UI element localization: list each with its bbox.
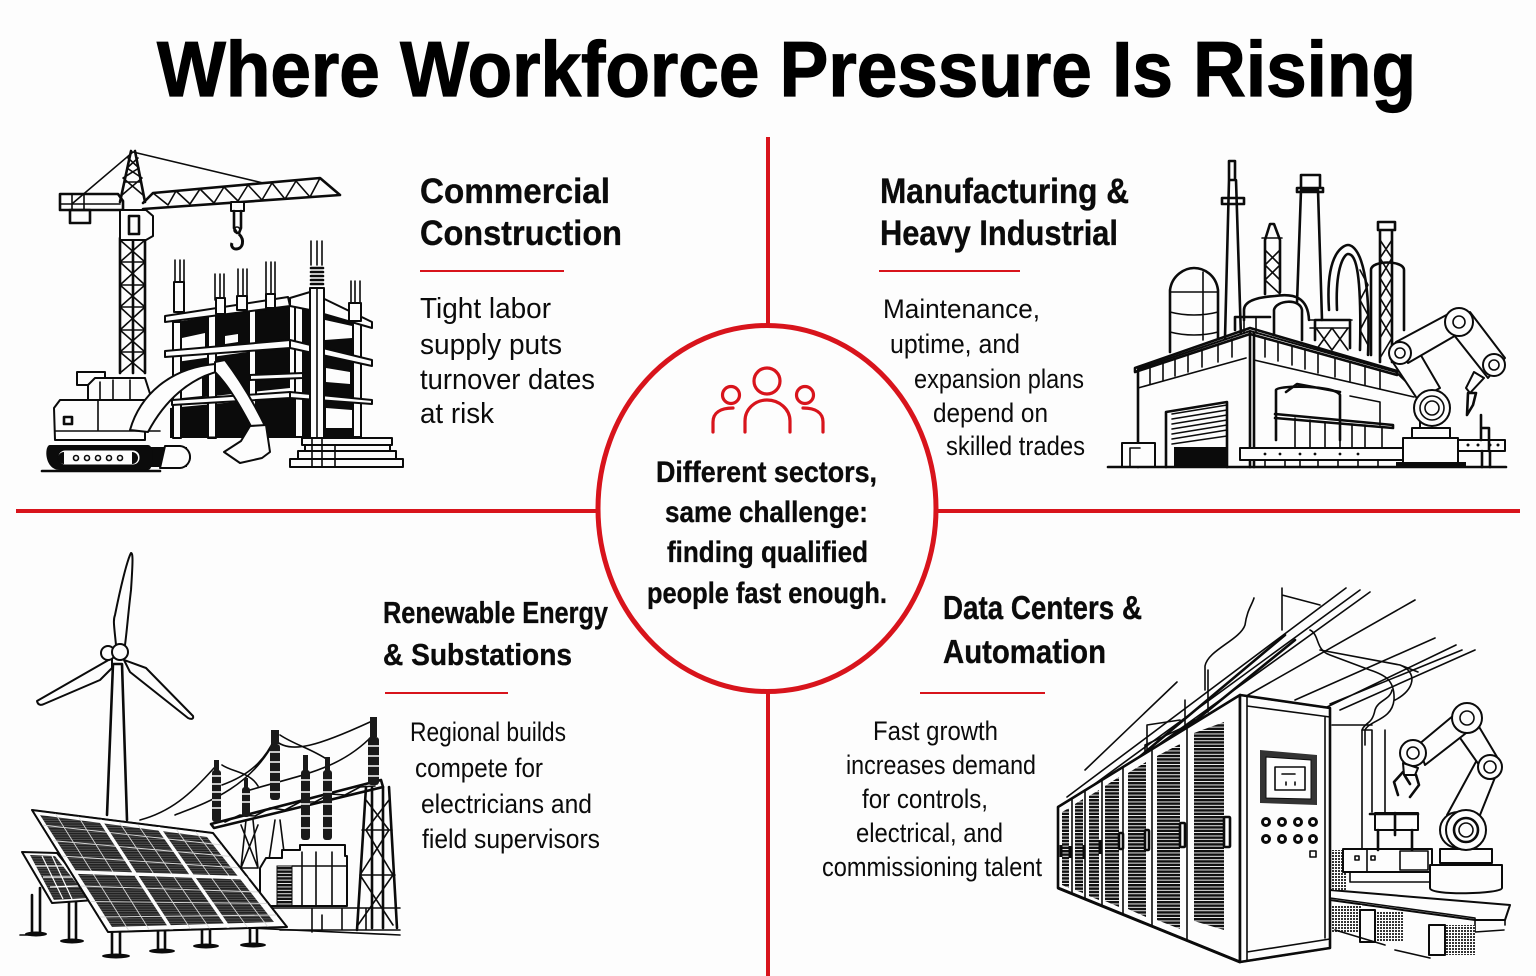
- callout circle: [598, 326, 936, 692]
- heading: commercial construction: Construction: [420, 214, 622, 253]
- text: manufacturing description: Maintenance,: [883, 294, 1040, 324]
- conveyor and boxes: [1330, 690, 1510, 958]
- accent rule: [420, 270, 564, 272]
- illustration: server racks, control cabinet and robot: [1058, 588, 1510, 962]
- text: construction description: supply puts: [420, 329, 562, 361]
- text: renewable description: electricians and: [421, 789, 592, 819]
- text: renewable description: [410, 717, 600, 854]
- robot arm with gripper: [1394, 703, 1502, 893]
- panel: manufacturing and heavy industrial: [879, 161, 1506, 467]
- text: data centers description: for controls,: [862, 784, 988, 814]
- building frame: [165, 241, 372, 438]
- illustration: crane, building and excavator: [42, 151, 403, 471]
- tower crane: [60, 151, 340, 373]
- server rack row: [1058, 695, 1240, 962]
- title: Where Workforce Pressure Is Rising: [157, 25, 1416, 113]
- wind turbine: [37, 553, 193, 820]
- accent rule: [879, 270, 1020, 272]
- text: data centers description: commissioning talent: [822, 852, 1042, 882]
- text: data centers description: electrical, and: [856, 818, 1003, 848]
- text: manufacturing description: expansion plans: [914, 364, 1084, 394]
- heading: data centers and automation: Automation: [943, 633, 1106, 670]
- panel: commercial construction: [42, 151, 622, 471]
- heading: manufacturing and heavy industrial: [880, 172, 1129, 253]
- text: manufacturing description: [883, 294, 1085, 461]
- center callout: [598, 326, 936, 692]
- callout text: Different sectors,: [656, 456, 877, 489]
- heading: manufacturing and heavy industrial: Manufacturing &: [880, 172, 1129, 211]
- lumber stack: [290, 438, 403, 467]
- text: renewable description: field supervisors: [422, 824, 600, 854]
- robot arm: [1389, 308, 1505, 467]
- text: data centers description: Fast growth: [873, 716, 998, 746]
- illustration: factory and robot arm: [1108, 161, 1506, 467]
- text: renewable description: Regional builds: [410, 717, 566, 747]
- panel: renewable energy and substations: [20, 553, 609, 958]
- accent rule: [920, 692, 1045, 694]
- heading: data centers and automation: [943, 589, 1142, 670]
- callout text: [647, 456, 887, 610]
- heading: commercial construction: Commercial: [420, 172, 610, 211]
- text: manufacturing description: uptime, and: [890, 329, 1020, 359]
- text: manufacturing description: skilled trades: [946, 431, 1085, 461]
- excavator: [42, 360, 270, 471]
- heading: renewable energy and substations: Renewable Energy: [383, 595, 609, 630]
- heading: data centers and automation: Data Centers &: [943, 589, 1142, 626]
- text: construction description: turnover dates: [420, 364, 595, 396]
- callout text: same challenge:: [665, 496, 868, 529]
- text: data centers description: increases demand: [846, 750, 1036, 780]
- overhead pipes and conduits: [1067, 588, 1475, 804]
- text: construction description: Tight labor: [420, 293, 551, 325]
- heading: commercial construction: [420, 172, 622, 253]
- solar panels: [20, 810, 400, 958]
- text: construction description: at risk: [420, 398, 494, 430]
- factory building: [1108, 328, 1506, 467]
- accent rule: [385, 692, 508, 694]
- heading: manufacturing and heavy industrial: Heavy Industrial: [880, 214, 1118, 253]
- heading: renewable energy and substations: [383, 595, 609, 672]
- text: manufacturing description: depend on: [933, 398, 1048, 428]
- text: construction description: [420, 293, 595, 430]
- callout text: finding qualified: [667, 536, 868, 569]
- illustration: wind turbine, solar panels and substation: [20, 553, 400, 958]
- panel: data centers and automation: [822, 588, 1510, 962]
- heading: renewable energy and substations: & Substations: [383, 637, 572, 672]
- control cabinet: [1240, 695, 1330, 962]
- callout text: people fast enough.: [647, 577, 887, 610]
- icon: group of people: [713, 368, 823, 432]
- substation: [140, 717, 400, 932]
- plant stacks and tanks: [1170, 161, 1404, 362]
- text: renewable description: compete for: [415, 753, 543, 783]
- text: data centers description: [822, 716, 1042, 882]
